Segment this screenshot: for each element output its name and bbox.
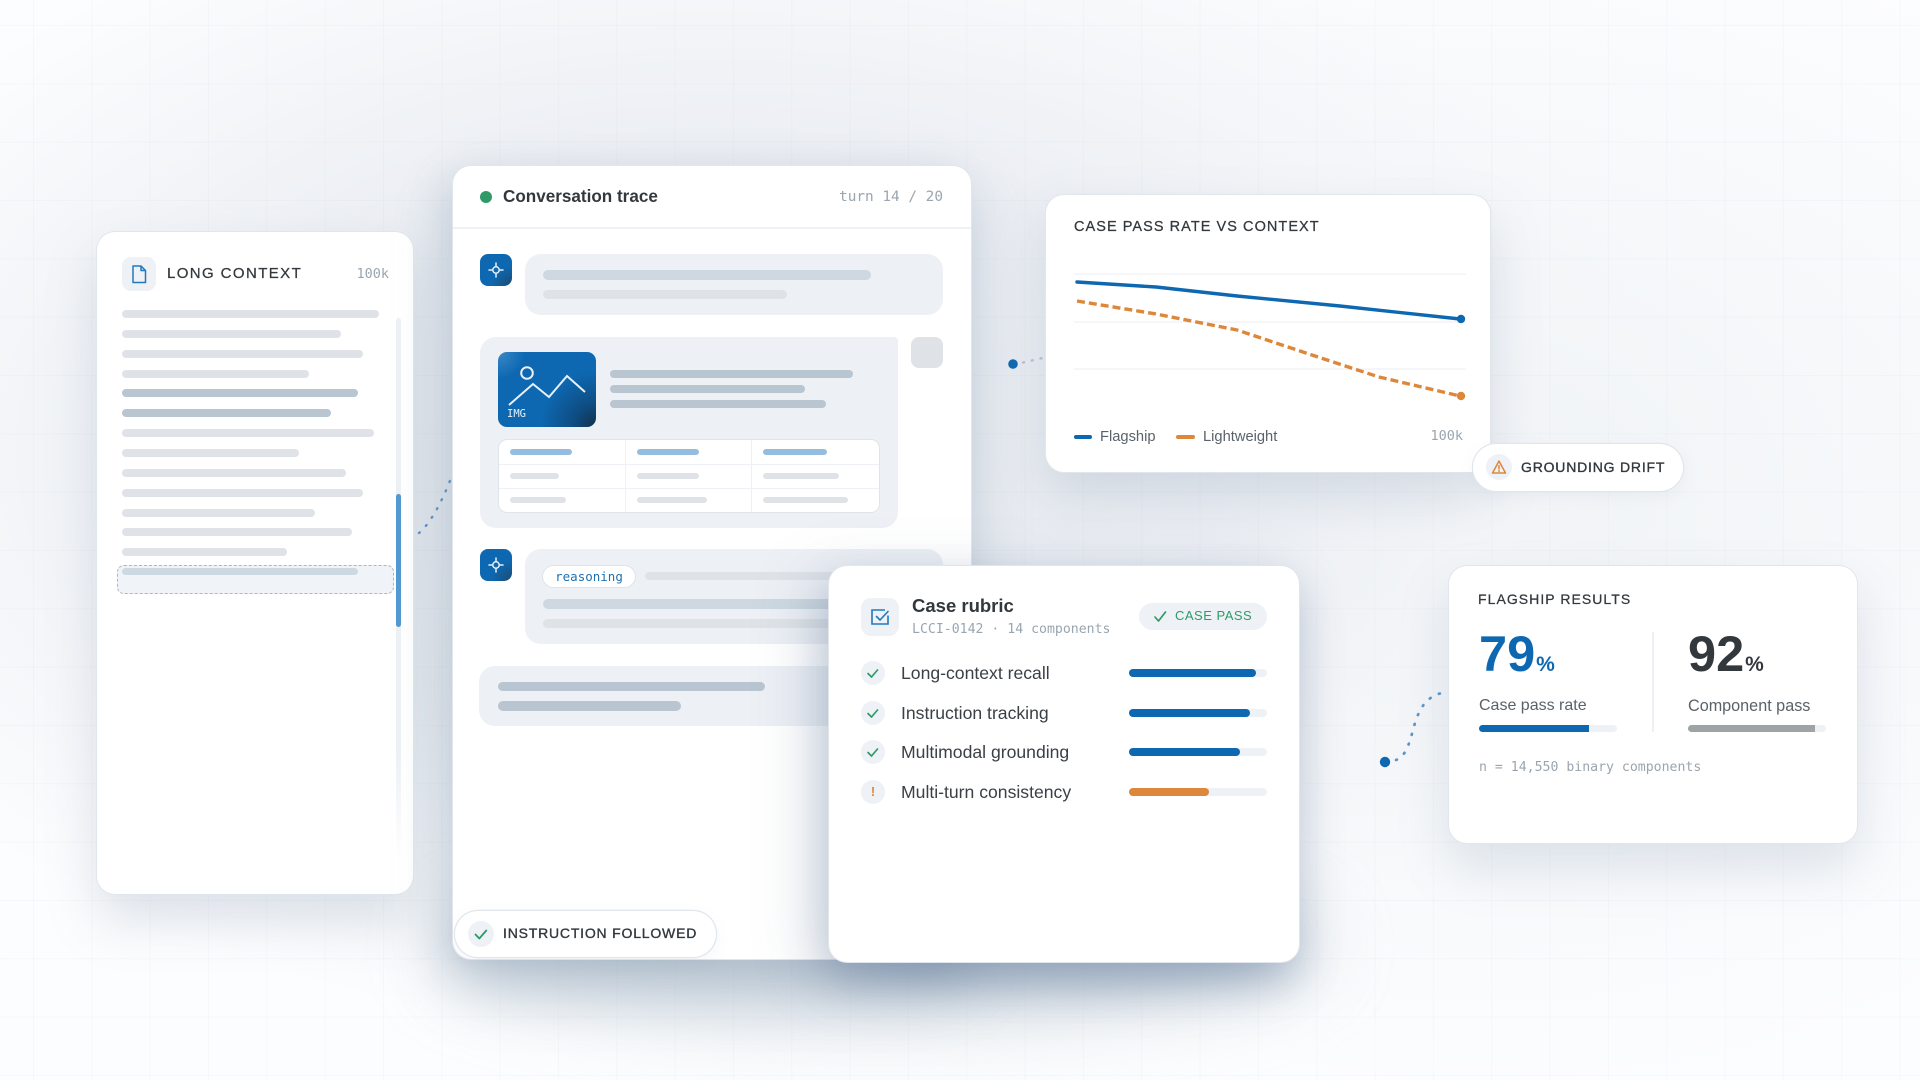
connector: results dot (1380, 692, 1442, 768)
rubric row: instruction tracking: Instruction tracking (901, 703, 1049, 723)
turn counter: turn 14 / 20 (839, 189, 943, 205)
status dot (480, 191, 492, 203)
badge: case pass (1139, 603, 1267, 630)
icon: assistant avatar (480, 254, 512, 286)
legend: 100k (1430, 428, 1463, 444)
panel: case rubric (829, 566, 1299, 962)
heading: case rubric: Case rubric (912, 594, 1014, 616)
panel: conversation trace (453, 166, 971, 959)
side placeholder (911, 337, 943, 368)
message bubble: image and table (480, 337, 898, 528)
metric: case pass rate (1479, 625, 1617, 732)
icon: document (122, 257, 156, 291)
icon: check (468, 921, 494, 947)
data table (499, 440, 879, 512)
metric: component pass: Component pass (1688, 696, 1810, 714)
token count: 100k (356, 266, 389, 282)
badge: grounding drift (1473, 444, 1683, 491)
rubric row: multi-turn consistency (861, 780, 1267, 804)
results heading: FLAGSHIP RESULTS (1478, 591, 1631, 607)
metric: case pass rate: Case pass rate (1479, 696, 1587, 714)
badge: instruction followed (455, 911, 716, 957)
image thumbnail (498, 352, 596, 427)
context text lines (122, 310, 379, 556)
rubric row: instruction tracking (861, 701, 1267, 725)
metric: case pass rate: 79% (1479, 625, 1555, 682)
icon: checkbox (861, 598, 899, 636)
metric: component pass: 92% (1688, 625, 1764, 682)
heading: conversation trace: Conversation trace (503, 186, 658, 206)
chart lines (1074, 274, 1466, 400)
rubric row: multimodal grounding: Multimodal grounding (901, 742, 1069, 762)
rubric row: multi-turn consistency: Multi-turn consistency (901, 782, 1071, 802)
connector: chart dot (1008, 357, 1043, 369)
icon: warning (1486, 454, 1512, 480)
metric: component pass (1688, 625, 1826, 732)
reasoning chip (543, 566, 635, 587)
legend: Lightweight (1203, 429, 1277, 445)
panel: flagship results (1449, 566, 1857, 843)
legend (1074, 428, 1463, 445)
sample size note: n = 14,550 binary components (1479, 760, 1701, 775)
rubric row: long-context recall (861, 661, 1267, 685)
message bubble: assistant (525, 254, 943, 315)
reasoning chip: reasoning (555, 569, 623, 584)
highlighted dashed passage (117, 565, 394, 594)
message bubble: user (479, 666, 943, 726)
caption lines (610, 370, 853, 408)
badge label: INSTRUCTION FOLLOWED (503, 925, 697, 941)
case id: LCCI-0142 · 14 components (912, 622, 1110, 636)
badge: case pass: CASE PASS (1175, 608, 1252, 623)
connector: long context to conversation (418, 480, 452, 534)
legend: Flagship (1100, 429, 1156, 445)
heading: long context: LONG CONTEXT (167, 265, 302, 282)
image thumbnail: IMG (507, 408, 526, 420)
badge label: GROUNDING DRIFT (1521, 458, 1665, 474)
panel: long context (97, 232, 413, 894)
rubric row: multimodal grounding (861, 740, 1267, 764)
rubric row: long-context recall: Long-context recall (901, 663, 1050, 683)
chart title: CASE PASS RATE VS CONTEXT (1074, 219, 1320, 235)
message bubble: reasoning (525, 549, 943, 644)
panel: line chart (1046, 195, 1490, 472)
icon: assistant avatar 2 (480, 549, 512, 581)
scrollbar (396, 318, 401, 862)
rubric row: multi-turn consistency: ! (871, 784, 875, 799)
